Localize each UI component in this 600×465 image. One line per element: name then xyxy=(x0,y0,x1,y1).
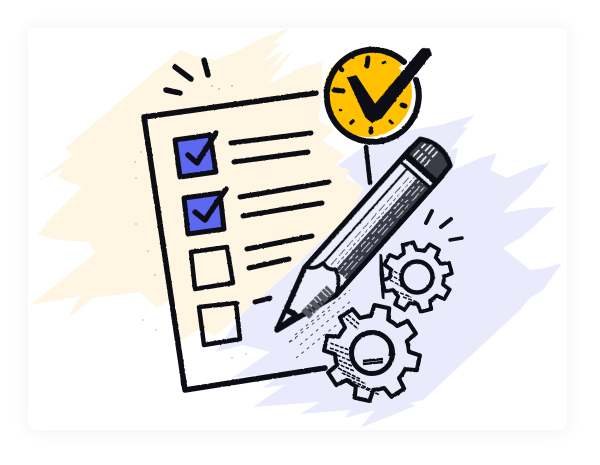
yellow brush stroke xyxy=(30,28,364,342)
pencil body xyxy=(261,149,442,344)
clock ticks xyxy=(334,57,405,132)
large gear hatch xyxy=(330,315,380,395)
clock ring xyxy=(327,50,419,142)
clock stem xyxy=(366,147,370,183)
paper speckles xyxy=(134,85,247,359)
lavender brush stroke xyxy=(215,115,562,428)
large check mark xyxy=(348,49,431,122)
pencil xyxy=(261,134,455,344)
white gap behind check xyxy=(405,50,426,74)
checklist text lines xyxy=(231,133,329,302)
small gear hatch xyxy=(389,269,417,302)
small gear side stroke xyxy=(380,256,384,297)
card background xyxy=(28,28,567,430)
small gear xyxy=(381,241,453,313)
attention rays xyxy=(166,60,208,93)
shading under pencil xyxy=(289,290,352,358)
pencil lead tip xyxy=(272,307,300,335)
clock face xyxy=(324,49,412,137)
gear motion rays xyxy=(426,211,462,240)
pencil eraser xyxy=(406,134,455,182)
pencil ferrule xyxy=(400,156,436,189)
small gear hub xyxy=(402,262,432,292)
pencil dark side hatch xyxy=(281,161,431,322)
large gear hub xyxy=(352,332,392,374)
large gear xyxy=(323,304,421,402)
checkbox 2 checked xyxy=(184,189,226,234)
checkbox 4 empty xyxy=(199,303,240,345)
paper outline xyxy=(144,60,370,390)
clock with check mark xyxy=(324,49,431,142)
checkbox 3 empty xyxy=(191,247,233,289)
checkbox 1 checked xyxy=(175,133,216,177)
